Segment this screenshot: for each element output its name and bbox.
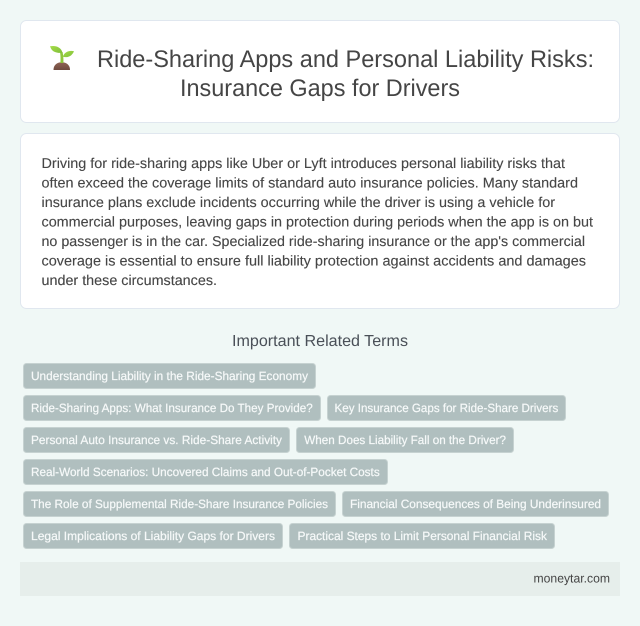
tag: when liability falls on driver bbox=[296, 428, 514, 452]
footer source text: moneytar.com bbox=[534, 572, 610, 586]
tag: key insurance gaps bbox=[328, 396, 566, 420]
tag: understanding liability: Understanding Liability in the Ride-Sharing Economy bbox=[31, 369, 308, 383]
footer bbox=[20, 562, 620, 596]
tag: what insurance apps provide: Ride-Sharing Apps: What Insurance Do They Provide? bbox=[31, 401, 313, 415]
tag: personal auto insurance bbox=[24, 428, 290, 452]
tag: supplemental policies: The Role of Supplemental Ride-Share Insurance Policies bbox=[31, 497, 328, 511]
text block: description: often exceed the coverage limits of standard auto insurance policies. Many standard bbox=[42, 176, 578, 192]
tag: financial consequences: Financial Consequences of Being Underinsured bbox=[350, 497, 601, 511]
tag: legal implications bbox=[24, 524, 282, 548]
text block: description: no passenger is in the car. Specialized ride-sharing insurance or the app's commercial bbox=[42, 234, 585, 250]
tag: financial consequences bbox=[342, 492, 608, 516]
tag: key insurance gaps: Key Insurance Gaps for Ride-Share Drivers bbox=[334, 401, 558, 415]
title: Insurance Gaps for Drivers bbox=[180, 75, 460, 102]
text block: description: commercial purposes, leaving gaps in protection during periods when the app is on but bbox=[42, 214, 593, 230]
text block: description: insurance plans exclude incidents occurring while the driver is using a vehicle for bbox=[42, 195, 555, 211]
panel: description bbox=[20, 134, 620, 308]
tag: real-world scenarios: Real-World Scenarios: Uncovered Claims and Out-of-Pocket Costs bbox=[31, 465, 380, 479]
tag: personal auto insurance: Personal Auto Insurance vs. Ride-Share Activity bbox=[31, 433, 282, 447]
tag: practical steps: Practical Steps to Limit Personal Financial Risk bbox=[298, 529, 548, 543]
heading: related terms: Important Related Terms bbox=[232, 333, 408, 350]
title: Ride-Sharing Apps and Personal Liability Risks: bbox=[97, 46, 594, 73]
title bbox=[97, 46, 594, 102]
tag: when liability falls on driver: When Does Liability Fall on the Driver? bbox=[304, 433, 506, 447]
text block: description: under these circumstances. bbox=[42, 273, 217, 289]
tag: understanding liability bbox=[24, 364, 316, 388]
panel: related term tags bbox=[24, 364, 608, 548]
text block: description bbox=[42, 156, 593, 289]
text block: description: coverage is essential to ensure full liability protection against accidents and damages bbox=[42, 254, 586, 270]
tag: legal implications: Legal Implications of Liability Gaps for Drivers bbox=[31, 529, 275, 543]
text block: description: Driving for ride-sharing apps like Uber or Lyft introduces personal liability risks that bbox=[42, 156, 565, 172]
tag: practical steps bbox=[290, 524, 554, 548]
tag: supplemental policies bbox=[24, 492, 336, 516]
tag: real-world scenarios bbox=[24, 460, 388, 484]
icon: seedling bbox=[50, 46, 74, 70]
tag: what insurance apps provide bbox=[24, 396, 320, 420]
panel: header bbox=[20, 20, 620, 122]
